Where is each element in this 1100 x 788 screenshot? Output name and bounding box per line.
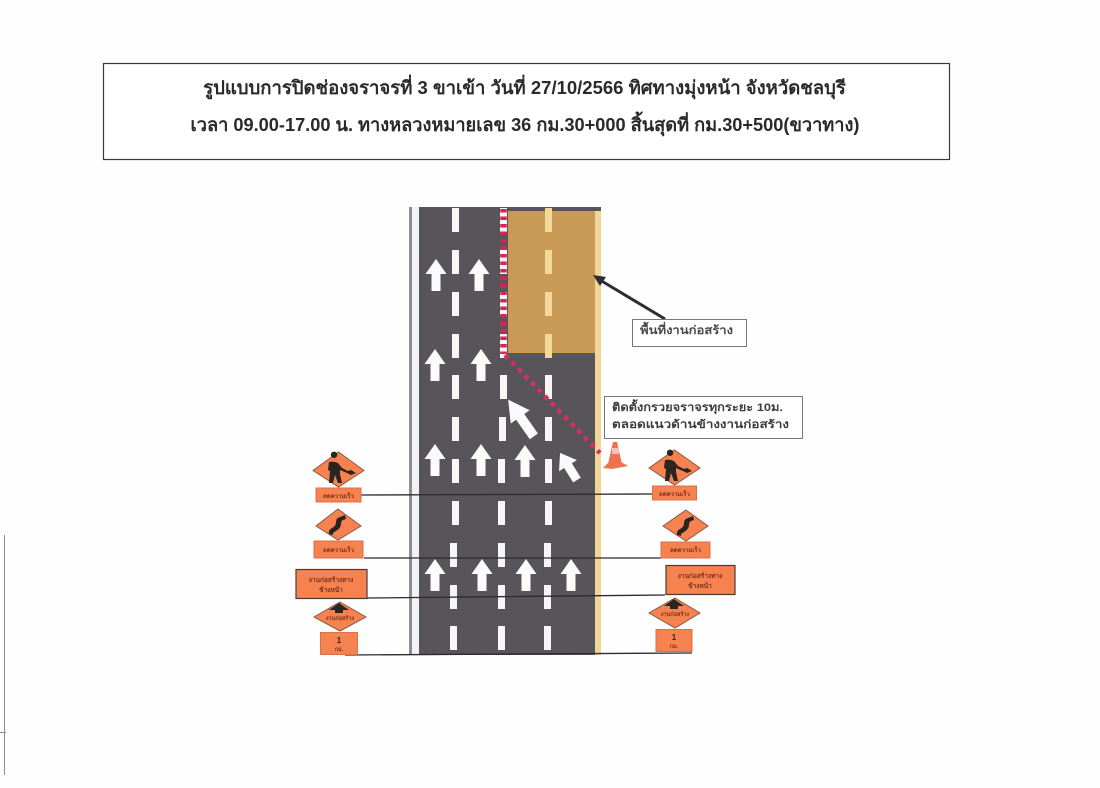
scan mark: left edge (0, 535, 6, 775)
sign: construction 1 km: กม. (670, 643, 679, 650)
sign: construction ahead: งานก่อสร้างทาง (678, 571, 722, 580)
title box (104, 64, 950, 160)
sign: road works (649, 450, 700, 500)
road diagram (409, 207, 601, 655)
sign: construction 1 km (314, 602, 366, 654)
sign: construction ahead (666, 566, 735, 594)
lane dashes (450, 208, 552, 650)
sign: road works: ลดความเร็ว (659, 489, 691, 498)
sign: curve (661, 510, 710, 558)
callout: traffic cones: ติดตั้งกรวยจราจรทุกระยะ 10ม. (612, 399, 783, 415)
callout: traffic cones: ตลอดแนวด้านข้างงานก่อสร้าง (612, 418, 789, 431)
callout: construction area (632, 320, 746, 346)
construction area (508, 211, 595, 353)
callout: traffic cones (604, 396, 802, 438)
arrow to construction area (593, 275, 665, 319)
title line 2: เวลา 09.00-17.00 น. ทางหลวงหมายเลข 36 กม.30+000 สิ้นสุดที่ กม.30+500(ขวาทาง) (191, 111, 859, 137)
sign: construction 1 km: งานก่อสร้าง (326, 614, 354, 622)
sign: construction ahead: ข้างหน้า (319, 585, 343, 594)
icon: traffic cone (603, 442, 628, 469)
sign: construction ahead: งานก่อสร้างทาง (309, 575, 353, 584)
sign: curve (314, 509, 363, 558)
sign: curve: ลดความเร็ว (323, 545, 355, 554)
sign: curve: ลดความเร็ว (670, 545, 702, 554)
left signs (296, 452, 367, 654)
sign connector lines (345, 494, 692, 655)
barrier line (500, 208, 600, 453)
sign: construction 1 km: 1 (672, 633, 677, 642)
sign: road works (313, 452, 364, 502)
sign: construction 1 km: งานก่อสร้าง (661, 610, 689, 618)
right signs (649, 450, 735, 652)
sign: road works: ลดความเร็ว (323, 491, 355, 500)
title line 1: รูปแบบการปิดช่องจราจรที่ 3 ขาเข้า วันที่ 27/10/2566 ทิศทางมุ่งหน้า จังหวัดชลบุรี (203, 74, 846, 100)
sign: construction 1 km: 1 (337, 636, 342, 645)
callout: construction area: พื้นที่งานก่อสร้าง (640, 321, 733, 337)
sign: construction ahead: ข้างหน้า (688, 581, 712, 590)
sign: construction ahead (296, 570, 367, 598)
sign: construction 1 km: กม. (335, 646, 344, 653)
sign: construction 1 km (649, 598, 700, 652)
lane arrows (424, 259, 586, 591)
